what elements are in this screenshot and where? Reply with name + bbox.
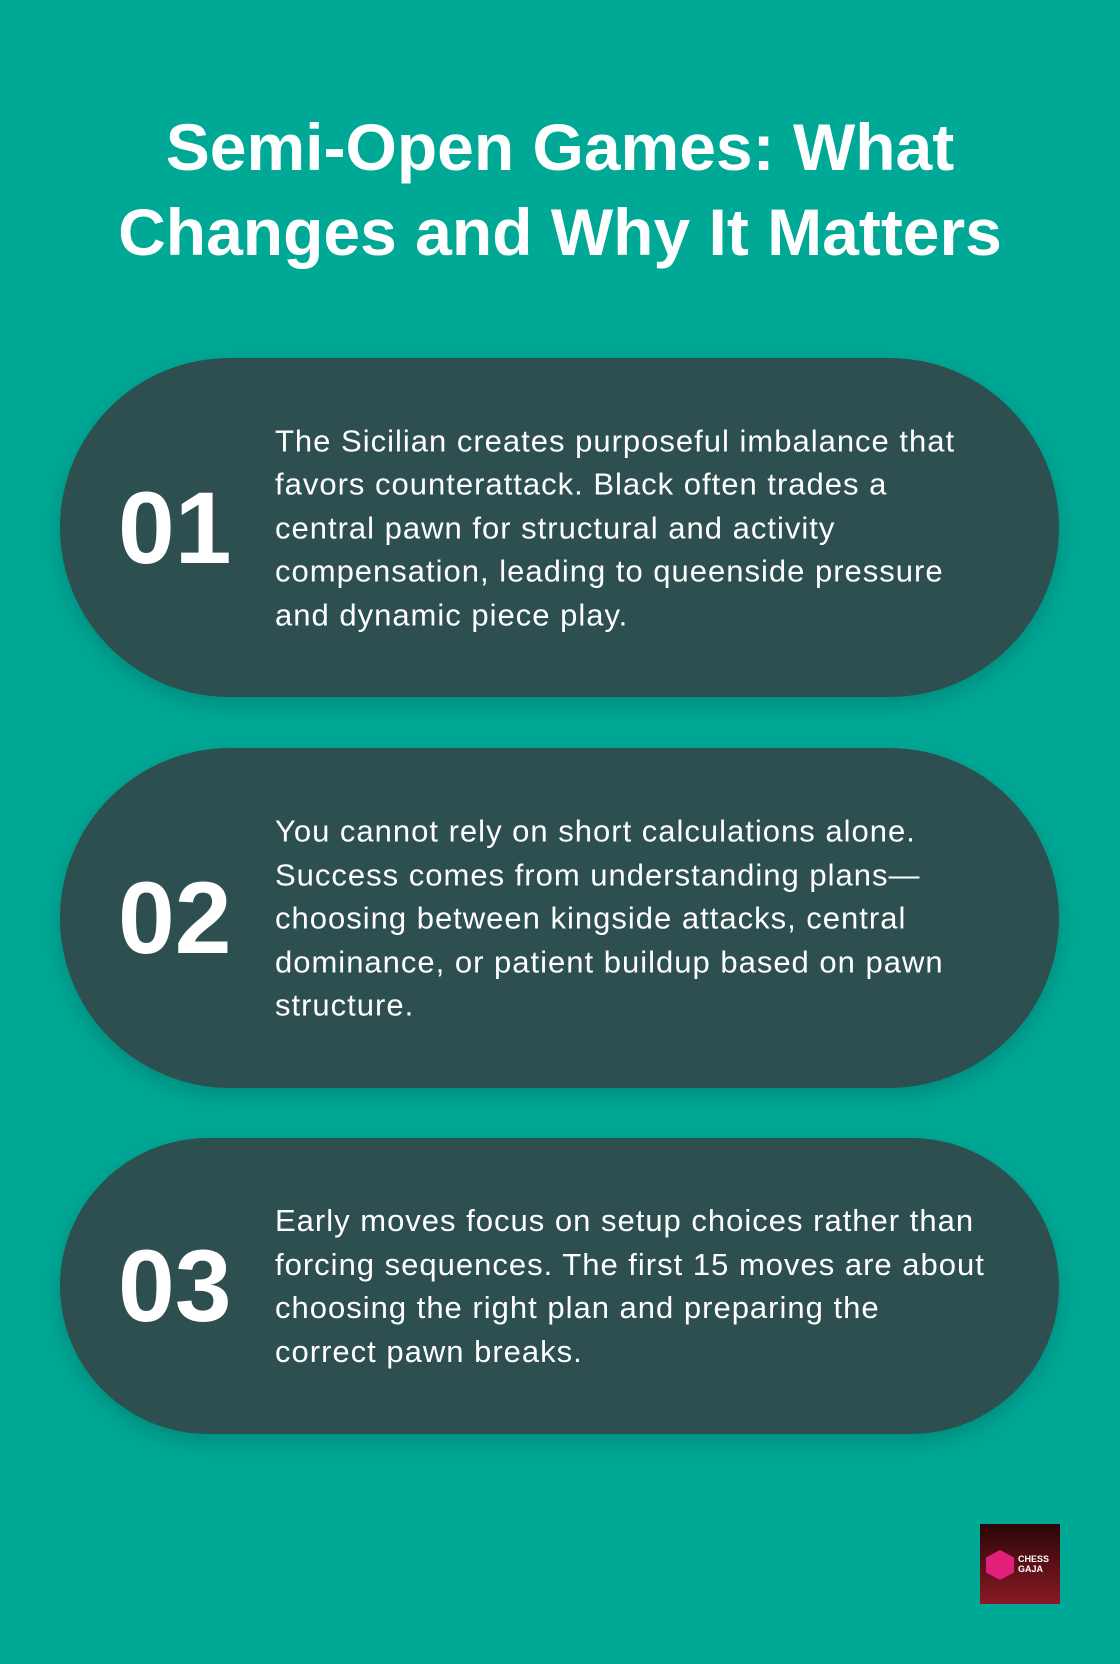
text 03: forcing sequences. The first 15 moves are about	[275, 1246, 985, 1282]
text 02	[275, 813, 944, 1022]
text 03: correct pawn breaks.	[275, 1334, 583, 1368]
panel: point 01	[60, 358, 1059, 697]
text 03	[275, 1203, 985, 1368]
number 01: 01	[118, 470, 231, 584]
text 03: choosing the right plan and preparing the	[275, 1290, 880, 1325]
text 01: and dynamic piece play.	[275, 597, 628, 632]
text 02: structure.	[275, 987, 414, 1022]
panel: point 03	[60, 1138, 1059, 1434]
text 01: favors counterattack. Black often trades a	[275, 466, 887, 501]
number 03: 03	[118, 1229, 231, 1343]
title: Changes and Why It Matters	[118, 195, 1002, 269]
logo	[980, 1524, 1060, 1604]
number 02: 02	[118, 861, 231, 975]
title: Semi-Open Games: What	[166, 110, 954, 184]
icon: elephant hexagon	[986, 1550, 1014, 1580]
panel: point 02	[60, 748, 1059, 1088]
logo text: GAJA	[1018, 1564, 1043, 1574]
logo text: CHESS	[1018, 1554, 1049, 1564]
text 03: Early moves focus on setup choices rather than	[275, 1203, 974, 1238]
title	[118, 110, 1002, 269]
text 02: choosing between kingside attacks, central	[275, 900, 906, 935]
logo text	[1018, 1554, 1049, 1574]
text 01: The Sicilian creates purposeful imbalance that	[275, 423, 955, 458]
text 02: dominance, or patient buildup based on pawn	[275, 944, 944, 979]
text 01: compensation, leading to queenside pressure	[275, 553, 944, 588]
text 02: Success comes from understanding plans—	[275, 857, 921, 892]
text 02: You cannot rely on short calculations alone.	[275, 813, 916, 848]
text 01	[275, 423, 955, 632]
text 01: central pawn for structural and activity	[275, 510, 835, 545]
